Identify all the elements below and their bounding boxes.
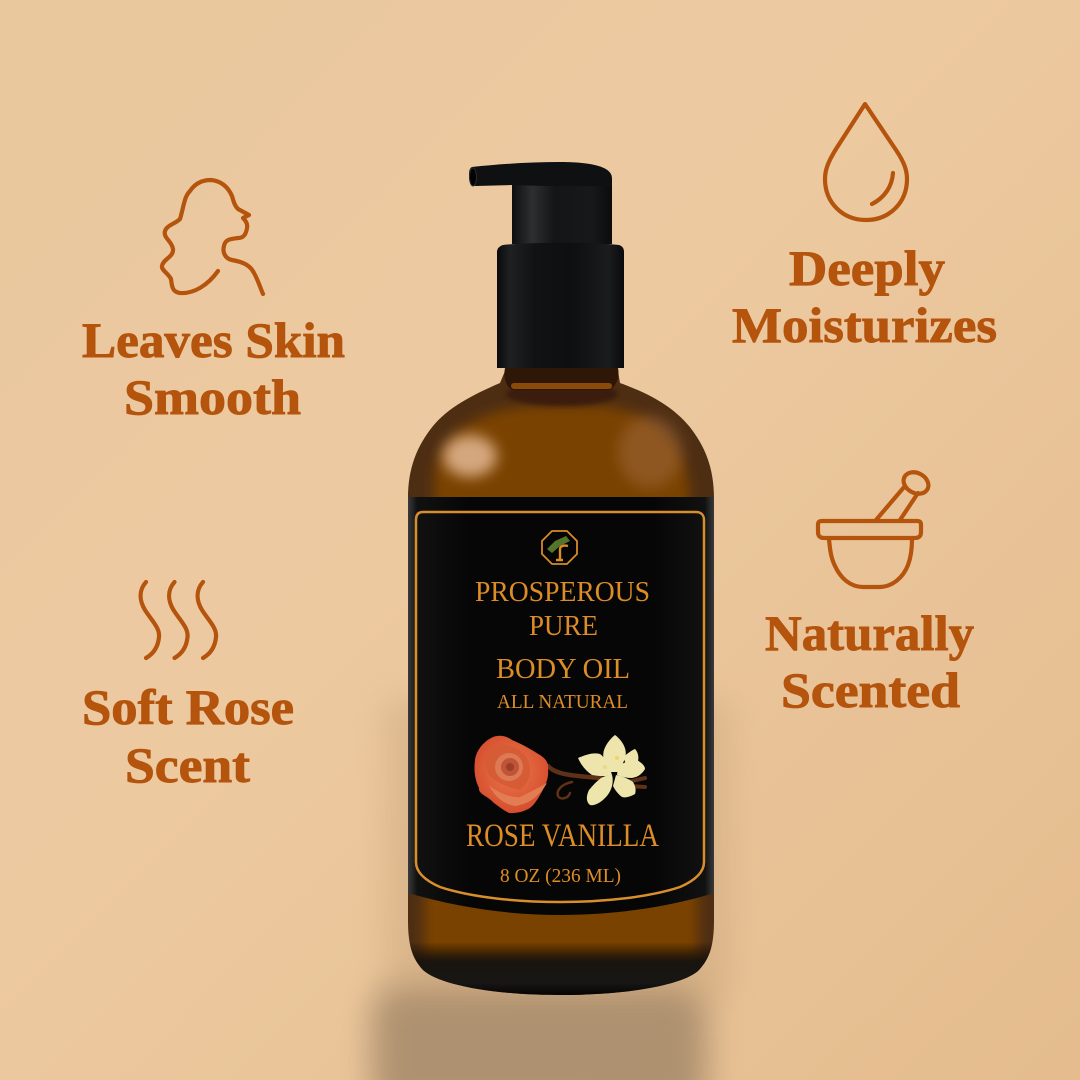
glass liquid — [424, 406, 698, 960]
bottle neck — [504, 368, 619, 406]
benefit: naturally scented — [765, 468, 974, 718]
bottle — [408, 162, 714, 995]
illustration: rose — [474, 736, 548, 813]
benefit: soft rose scent — [82, 582, 294, 793]
label text: PROSPEROUS — [475, 576, 650, 608]
label text: 8 OZ (236 ML) — [500, 865, 621, 887]
label text: BODY OIL — [496, 653, 630, 685]
heading: deeply moisturizes: Moisturizes — [732, 297, 997, 353]
pump stem — [512, 180, 612, 244]
benefit: deeply moisturizes — [732, 104, 997, 353]
pump spout — [469, 162, 612, 186]
heading: leaves skin smooth — [82, 312, 345, 425]
heading: soft rose scent — [82, 679, 294, 793]
icon: mortar and pestle — [818, 468, 932, 587]
bottle glass — [408, 371, 714, 995]
logo — [542, 531, 577, 564]
bottle shadow — [372, 700, 730, 1080]
illustration: vanilla flower — [578, 735, 645, 805]
heading: naturally scented: Naturally — [765, 605, 974, 661]
heading: deeply moisturizes: Deeply — [789, 240, 945, 296]
bottle base — [408, 893, 714, 995]
glass highlight — [443, 435, 497, 477]
heading: soft rose scent: Soft Rose — [82, 679, 294, 735]
label text — [466, 576, 659, 887]
heading: leaves skin smooth: Leaves Skin — [82, 312, 345, 368]
label text: ROSE VANILLA — [466, 818, 659, 854]
pump — [469, 162, 624, 368]
heading: soft rose scent: Scent — [125, 737, 250, 793]
heading: deeply moisturizes — [732, 240, 997, 353]
pump collar — [497, 243, 624, 368]
heading: naturally scented — [765, 605, 974, 718]
illustration: vanilla bean stem — [548, 766, 645, 798]
benefit: leaves skin smooth — [82, 180, 345, 425]
label — [408, 497, 714, 915]
icon: water drop — [825, 104, 907, 220]
icon: face profile — [162, 180, 263, 294]
label text: ALL NATURAL — [497, 691, 628, 713]
icon: scent waves — [141, 582, 216, 658]
glass right reflection — [618, 416, 682, 488]
label text: PURE — [529, 610, 598, 642]
label background — [408, 497, 714, 915]
label gold border — [416, 512, 704, 902]
heading: naturally scented: Scented — [781, 662, 960, 718]
spout opening — [470, 168, 476, 186]
heading: leaves skin smooth: Smooth — [124, 369, 301, 425]
